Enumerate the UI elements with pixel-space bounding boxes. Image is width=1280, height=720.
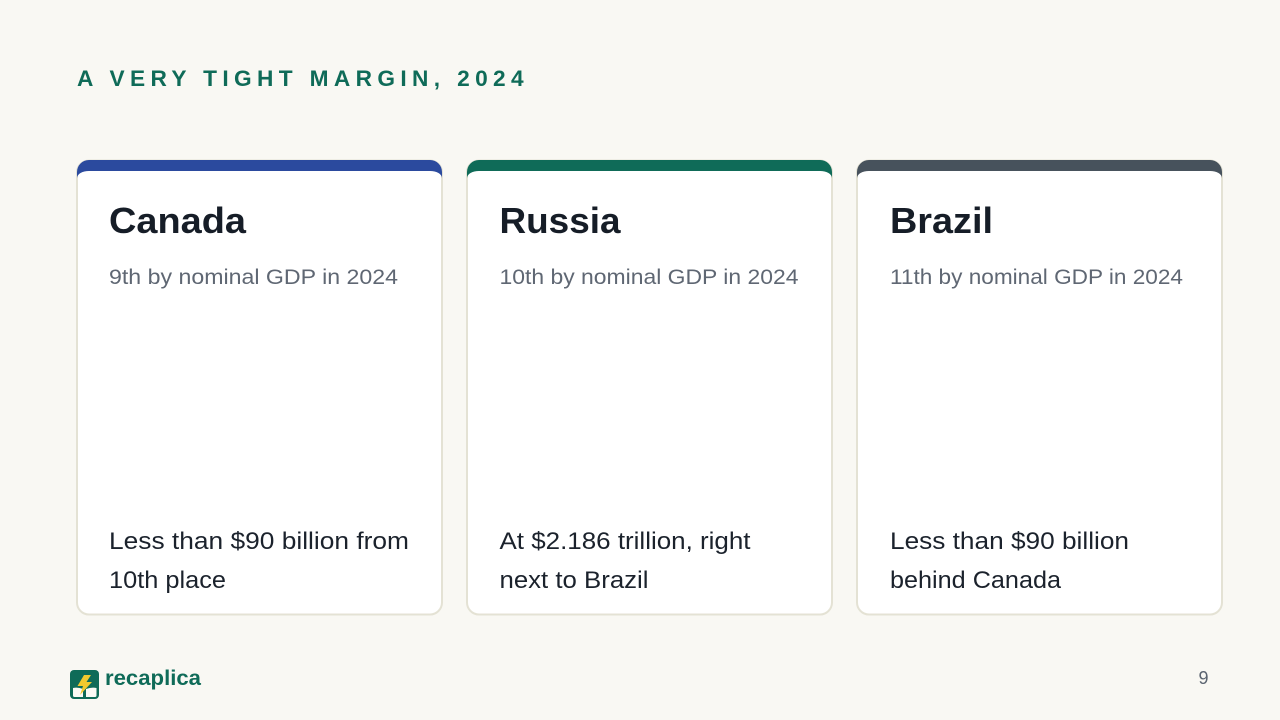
panel: Brazil [857, 160, 1222, 614]
rank: Brazil: 11th by nominal GDP in 2024 [890, 266, 1183, 289]
accent bar: Brazil [857, 160, 1222, 178]
accent bar: Canada [77, 160, 442, 178]
note: Canada: 10th place [109, 567, 226, 594]
note: Canada: Less than $90 billion from [109, 528, 409, 555]
panel: Russia [467, 160, 832, 614]
icon: book with lightning bolt [70, 670, 99, 699]
title: A VERY TIGHT MARGIN, 2024 [77, 66, 529, 91]
heading: Canada: Canada [109, 200, 247, 241]
note: Brazil: behind Canada [890, 567, 1062, 594]
rank: Russia: 10th by nominal GDP in 2024 [500, 266, 799, 289]
heading: Brazil: Brazil [890, 200, 993, 241]
page number: 9 [1198, 668, 1209, 688]
panel: Canada [77, 160, 442, 614]
note: Russia: At $2.186 trillion, right [500, 528, 751, 555]
wordmark: recaplica [105, 667, 201, 690]
logo: recaplica [70, 667, 201, 699]
note: Russia: next to Brazil [500, 567, 648, 594]
note: Brazil: Less than $90 billion [890, 528, 1129, 555]
heading: Russia: Russia [500, 200, 621, 241]
rank: Canada: 9th by nominal GDP in 2024 [109, 266, 398, 289]
accent bar: Russia [467, 160, 832, 178]
